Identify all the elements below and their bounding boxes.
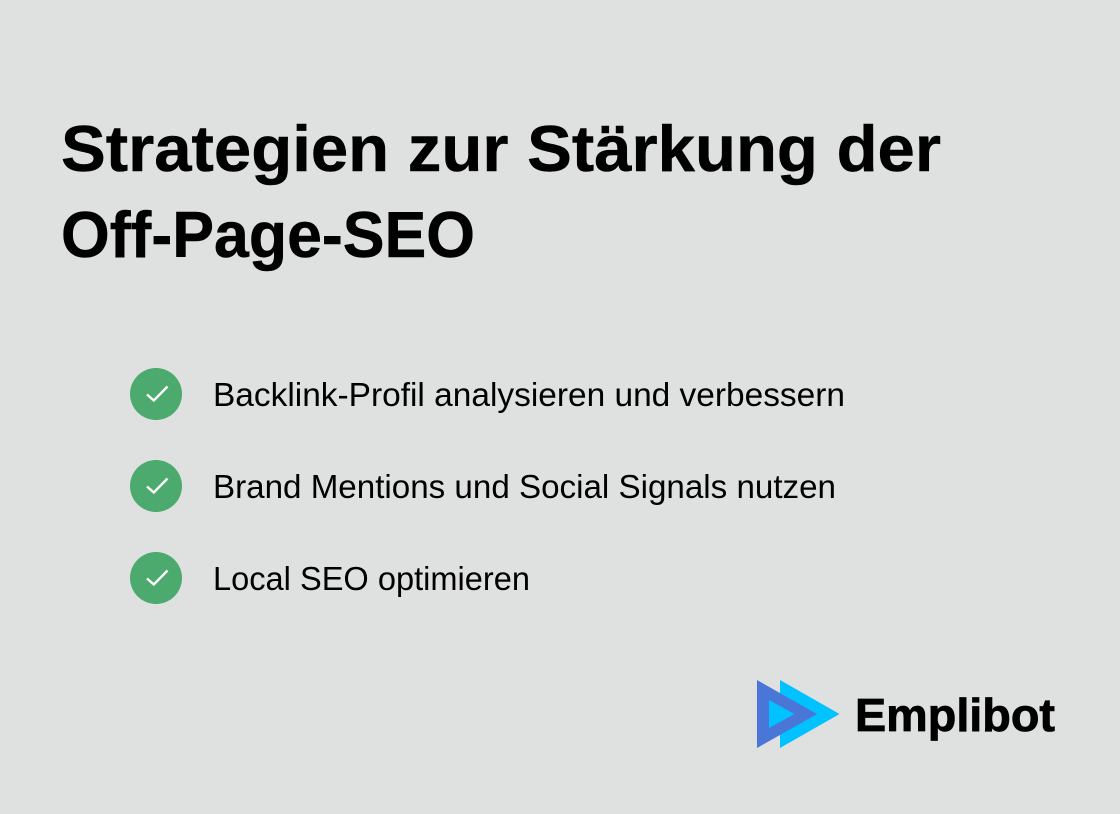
icon: check [130,368,182,420]
text: item 1: Backlink-Profil analysieren und verbessern [213,376,845,413]
icon: play triangles [757,680,840,748]
title [61,112,941,271]
checklist [130,368,845,604]
wordmark: Emplibot [855,689,1055,741]
icon: check [130,460,182,512]
item 1 [130,368,845,420]
text: item 2: Brand Mentions und Social Signals nutzen [213,468,836,505]
item 3 [130,552,530,604]
item 2 [130,460,836,512]
title: Strategien zur Stärkung der [61,112,941,185]
icon: check [130,552,182,604]
logo [757,680,1055,748]
text: item 3: Local SEO optimieren [213,560,530,597]
title: Off-Page-SEO [61,198,475,271]
